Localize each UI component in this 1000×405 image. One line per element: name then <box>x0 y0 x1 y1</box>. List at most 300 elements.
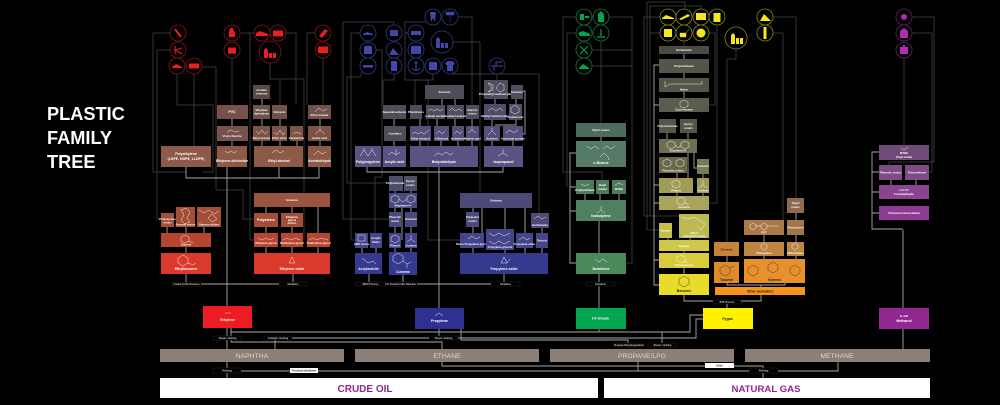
box: acrylic solvents: Acetate <box>256 88 267 92</box>
box: isobutylene <box>576 200 626 221</box>
label: Friedel Crafts reaction: Friedel Crafts Reaction <box>390 283 417 286</box>
feedstock bars <box>160 349 930 362</box>
box: acrylonitrile <box>355 253 382 274</box>
box: toluene upper <box>714 242 739 256</box>
box: acetone: Acetone <box>486 136 498 140</box>
box: polyesters: Polyesters <box>257 218 275 222</box>
box: polystyrene <box>159 213 176 227</box>
box: nylon <box>659 78 709 92</box>
label: refining <box>213 368 241 373</box>
label: refining: Refining <box>222 370 232 372</box>
box: epoxy resins <box>404 176 417 191</box>
label: oxidation: Oxidation <box>500 283 512 286</box>
box: phenolic resins: Phenolic <box>389 215 401 219</box>
box: butyl rubber: rubber <box>598 187 608 191</box>
box: polyurethanes <box>460 193 532 208</box>
box: formaldehyde: H-C=O <box>899 188 909 192</box>
box: phenol <box>389 233 401 248</box>
label: solvation <box>586 282 615 286</box>
box: styrene: Styrene <box>660 228 671 232</box>
box: glycol ethers: Ethylene <box>286 215 298 219</box>
box: acrylic acid: Acrylic acid <box>385 160 404 164</box>
box: alkyd polyester resins: polyester resins <box>683 234 705 238</box>
box: polymethyl methacrylate <box>479 80 513 99</box>
panel: ethylene family icons <box>169 25 331 74</box>
box: methyl ether: MTBE <box>615 187 623 191</box>
box: formaldehyde: Formaldehyde <box>894 192 914 196</box>
box: cyclohexane: Cyclohexane <box>675 108 693 112</box>
box: polycarbonate: Polycarbonate <box>386 181 406 185</box>
title: TREE <box>47 152 96 172</box>
label: fractional distillation white tag <box>290 368 318 373</box>
box: isobutanol <box>451 126 465 141</box>
box: ethylene glycol <box>280 233 304 247</box>
box: polyesters <box>254 213 278 227</box>
box: n-butyl acetate: n-Butyl acetate <box>425 114 446 118</box>
label: steam cracking <box>213 336 242 340</box>
icon: spray bottle <box>315 25 331 41</box>
bar: naphtha <box>160 349 344 362</box>
box: ethyl alcohol <box>254 146 303 167</box>
box: butyric acid esters <box>466 105 479 119</box>
box: phenol: Phenol <box>390 244 400 248</box>
label: Friedel Crafts reaction <box>172 282 201 286</box>
icon: card <box>186 58 202 74</box>
box: ethyl amines <box>253 126 271 141</box>
box: PVC <box>217 105 248 119</box>
box: acetone solvents <box>405 212 417 227</box>
process connector lines <box>167 54 916 378</box>
icon: paint roller <box>442 9 458 25</box>
box: styrene <box>161 233 211 247</box>
process labels <box>172 282 778 373</box>
box: polypropylene <box>355 146 381 167</box>
box: formaldehyde <box>879 185 929 199</box>
box: propylene <box>415 308 464 329</box>
box: hexamethylene <box>659 59 709 73</box>
box: butanols <box>425 85 464 99</box>
box: acetone <box>484 126 500 141</box>
box: paraxylene: Paraxylene <box>756 251 772 255</box>
box: ethoxylates <box>254 193 330 207</box>
box: benzene: Benzene <box>677 289 691 293</box>
box: ethylene dichloride <box>216 146 248 167</box>
box: ethylamine <box>289 126 305 141</box>
box: polybutadiene <box>575 180 595 194</box>
box: polyols <box>536 233 548 248</box>
panel: pygas boxes <box>658 46 805 329</box>
box: propylene oxide <box>460 253 548 274</box>
box: ethyl ether <box>272 126 288 141</box>
box: glycol ethers: ethers <box>288 221 297 225</box>
box: polyethylene: Polyethylene <box>175 152 197 156</box>
box: glycol ethers <box>456 233 488 248</box>
label: catalytic cracking <box>264 336 292 340</box>
box: superabsorbents: Superabsorbents <box>383 110 407 114</box>
box: alkyd resins: resins <box>791 205 800 209</box>
box: ethylamine: Ethylamine <box>289 136 305 140</box>
box: polystyrene: resins <box>163 220 172 224</box>
box: ethyl acetate <box>308 105 331 119</box>
box: isophorone: Isophorone <box>508 115 524 119</box>
box: polyether glycols: Propylene glycols <box>488 245 513 249</box>
label: fractional distillation white tag: Fractional distillation <box>292 370 317 372</box>
bar: natural gas <box>604 378 930 398</box>
box: polypropylene: Polypropylene <box>356 160 380 164</box>
icon: ribbon <box>170 25 186 41</box>
box: superabsorbents <box>383 105 407 119</box>
box: acetic acid: Acetic acid <box>312 136 327 140</box>
panel: propylene family icons <box>360 9 505 74</box>
box: butyric acid <box>464 126 481 141</box>
label: propane dehydrogenation: Propane Dehydrogenation <box>614 344 644 347</box>
icon: fabric <box>270 25 286 41</box>
icon: phone <box>386 58 402 74</box>
box: hexamethylene: Polyurethanes <box>674 64 694 68</box>
box: plasticizers: Plasticizers <box>788 226 804 230</box>
box: methyl methacrylate <box>481 104 509 120</box>
box: acetone solvents: Solvents <box>405 217 417 221</box>
box: C4 stream <box>576 308 626 329</box>
box: bisphenol A <box>659 139 697 153</box>
box: epoxy resins: resins <box>684 126 693 130</box>
panel: C4 boxes <box>575 123 626 329</box>
box: orthoxylene: Orthoxylene <box>787 251 804 255</box>
box: isobutylene: Isobutylene <box>591 214 611 218</box>
label: oxidation <box>279 282 307 286</box>
box: polyurethanes: Polyurethane <box>908 170 927 174</box>
box: acrylic solvents: solvents <box>256 92 268 96</box>
box: triethylene glycol: Triethylene glycol <box>306 241 331 245</box>
box: ethyl ether: Ethyl ether <box>272 136 288 140</box>
source bars <box>160 378 930 398</box>
box: propylene: Propylene <box>431 319 448 323</box>
box: plasticizers: Plasticizers <box>408 110 424 114</box>
box: ethylene oxide <box>254 253 330 274</box>
icon: pipes <box>576 9 592 25</box>
box: acrylic solvents <box>253 85 270 99</box>
box: methanol <box>879 308 929 329</box>
box: acetaldehyde <box>308 146 331 167</box>
box: alkyd resins: Alkyd <box>792 201 800 205</box>
box: diethylene glycol: Ethylene glycol <box>255 241 277 245</box>
box: styrene rubber: Styrene rubber <box>199 222 220 226</box>
icon: shoe sole <box>676 9 692 25</box>
box: isopropyl acetate <box>501 126 525 141</box>
box: phenolic resins <box>659 157 687 173</box>
box: ethylbenzene <box>161 253 211 274</box>
box: ethylene acetate: derivatives <box>254 112 269 116</box>
box: methanol: Methanol <box>896 319 912 323</box>
box: polycarbonate: Polycarbonate <box>658 124 678 128</box>
box: styrene <box>659 223 672 238</box>
icon: construction <box>386 42 402 58</box>
box: bisphenol A: Bisphenol A <box>670 148 687 152</box>
label: ammoxidation <box>356 282 385 286</box>
panel: C4 family icons <box>576 9 609 74</box>
box: butyric acid: Butyric acid <box>464 136 481 140</box>
box: solvents: Solvents <box>511 90 523 94</box>
box: ethylbenzene: Ethylbenzene <box>175 267 197 271</box>
box: PET: PET <box>761 230 767 234</box>
box: epoxy resins: Epoxy <box>406 179 415 183</box>
box: vinyl chloride <box>217 126 248 141</box>
box: toluene upper: Solvents <box>720 248 733 252</box>
box: ethyl hexanol: Ethyl hexanol <box>411 136 430 140</box>
bar: methane <box>745 349 930 362</box>
box: butadiene: Butadiene <box>593 267 610 271</box>
label: oxidation <box>491 282 520 286</box>
box: polyether polyols <box>466 212 480 227</box>
bar: crude oil: CRUDE OIL <box>338 384 392 395</box>
label: steam cracking <box>648 343 677 347</box>
box: propylene oxide: Propylene oxide <box>490 267 518 271</box>
box: nylon: Nylon <box>680 88 688 92</box>
box: toluene <box>714 262 739 283</box>
box: butyraldehyde: Butyraldehyde <box>432 160 456 164</box>
box: cumene: Cumene <box>396 270 410 274</box>
product connector lines <box>153 2 934 263</box>
box: polybutadiene: Polybutadiene <box>575 188 595 192</box>
icon: tire station <box>593 9 609 25</box>
box: acrylic acid <box>383 146 406 167</box>
box: ABS resins: ABS resins <box>354 242 370 246</box>
box: ethylene glycol: Diethylene glycol <box>280 241 304 245</box>
box: ethyl alcohol: Ethyl alcohol <box>268 159 290 163</box>
box: polymethyl methacrylate: Polymethyl methacrylate <box>479 92 513 96</box>
box: acetic acid <box>308 126 331 141</box>
box: n-butenes: n-Butene <box>593 161 609 165</box>
box: n-butenes <box>576 141 626 167</box>
bar: ethane <box>355 349 539 362</box>
box: styrene copolymers <box>176 207 196 227</box>
box: cumene <box>659 196 709 210</box>
icon: shoe <box>576 25 592 41</box>
box: xylenes: Xylenes <box>768 278 781 282</box>
icon: tube <box>757 25 773 41</box>
box: surfactants: Surfactants <box>676 48 692 52</box>
box: isobutanol: Isobutanol <box>451 136 465 140</box>
label: steam cracking: Steam cracking <box>435 337 453 340</box>
box: acetone: Acetone <box>697 188 709 192</box>
label: oxidation: Oxidation <box>287 283 299 286</box>
box: styrene rubber <box>197 207 221 227</box>
box: xylene <box>659 240 709 251</box>
label: refining <box>749 368 778 373</box>
icon: tooth <box>425 9 441 25</box>
box: vinyl chloride: Vinyl chloride <box>223 134 242 138</box>
box: ethylene acetate: Ethylene <box>255 108 268 112</box>
box: solvents <box>272 105 287 119</box>
box: isobutyl acetate: Isobutyl acetate <box>445 114 467 118</box>
icon: containers <box>259 41 281 63</box>
box: acrylic fibers <box>370 233 382 248</box>
label: steam cracking <box>429 336 458 340</box>
icon: ball <box>693 25 709 41</box>
box: benzene <box>659 274 709 295</box>
box: polyether polyols: Polyester <box>466 215 480 219</box>
icon: construction <box>757 9 773 25</box>
bar: ethane: ETHANE <box>433 353 461 360</box>
box: acetone <box>405 233 417 248</box>
box: cumene: Cumene <box>678 205 690 209</box>
box: surfactants <box>659 46 709 54</box>
box: polycarbonate <box>386 176 406 191</box>
box: pygas <box>703 308 753 329</box>
box: MTBE <box>879 145 929 160</box>
box: butyraldehyde <box>410 146 478 167</box>
box: epoxy resins <box>680 119 697 133</box>
label: steam cracking: Steam cracking <box>219 337 237 340</box>
box: acrylates <box>384 126 406 141</box>
box: styrene copolymers: Styrene resins <box>176 222 196 226</box>
box: glycol ethers: glycol <box>288 218 296 222</box>
icon: container <box>408 42 424 58</box>
box: butyl rubber: Butyl <box>599 183 606 187</box>
icon: medicine bottle <box>709 9 725 25</box>
box: nylon resins: Nylon resins <box>592 128 610 132</box>
box: ethylbenzene: Ethylbenzene <box>675 263 694 267</box>
icon: anchor <box>408 58 424 74</box>
title: FAMILY <box>47 128 112 148</box>
icon: sneaker <box>660 9 676 25</box>
box: alkyd resins <box>787 198 804 213</box>
label: ammoxidation: MIOX Process <box>362 283 379 286</box>
label: BTX process <box>713 300 741 304</box>
box: bisphenol A <box>389 193 417 208</box>
bar: natural gas: NATURAL GAS <box>732 384 801 395</box>
box: acetaldehyde: Acetaldehyde <box>308 159 331 163</box>
icon: containers <box>725 27 747 49</box>
box: solvents <box>511 85 523 99</box>
box: PET <box>744 220 784 235</box>
box: propylene glycol ether: Propylene ether <box>514 242 536 246</box>
icon: shirt <box>442 58 458 74</box>
box: isobutyl acetate <box>445 105 467 119</box>
box: n-butanol: n-Butanol <box>435 136 448 140</box>
box: acrylic fibers: Acrylic <box>371 236 381 240</box>
box: xylenes <box>744 259 805 283</box>
box: polyether glycols <box>486 229 514 250</box>
label: solvation: Solvation <box>595 283 606 286</box>
label: catalytic cracking: Catalytic cracking <box>268 337 289 340</box>
box: ethoxylates: Solvents <box>286 198 298 202</box>
box: solvents <box>697 159 709 174</box>
icon: cushion <box>660 25 676 41</box>
bar: propane/LPG: PROPANE/LPG <box>618 353 666 360</box>
panel: pygas family icons <box>660 9 773 49</box>
panel: methanol boxes <box>879 145 929 329</box>
box: n-butyl acetate <box>425 105 446 119</box>
box: methanol: H–OH <box>900 314 908 318</box>
box: ethylene: Ethylene <box>220 318 235 322</box>
box: MTBE: MTBE <box>900 151 908 155</box>
box: acrylonitrile: Acrylonitrile <box>358 267 379 271</box>
box: PVC: PVC <box>228 110 236 114</box>
box: paraxylene <box>744 242 784 256</box>
box: acetone: Acetone <box>405 244 417 248</box>
bar: methane: METHANE <box>821 353 854 360</box>
icon: spray can <box>896 25 912 41</box>
icon: boot <box>576 58 592 74</box>
box: propylene glycol ether <box>514 233 536 248</box>
box: ethylbenzene <box>659 253 709 268</box>
box: ethylene oxide: Ethylene oxide <box>280 267 304 271</box>
box: isopropyl acetate: Isopropyl acetate <box>501 136 525 140</box>
box: polystyrene: Polystyrene <box>159 217 176 221</box>
box: bisphenol A: Bisphenol A <box>395 204 412 208</box>
icon: medical tube <box>170 42 186 58</box>
box: ethylene <box>203 306 252 328</box>
box: triethylene glycol <box>306 233 331 247</box>
icon: containers <box>431 31 453 53</box>
icon: shoe <box>169 58 185 74</box>
title: PLASTIC <box>47 104 125 124</box>
label: steam cracking: Steam cracking <box>654 344 672 347</box>
box: polycarbonate <box>658 119 678 133</box>
box: C4 stream: C4 stream <box>592 316 609 320</box>
box: orthoxylene <box>787 242 804 256</box>
box: butyric acid esters: esters <box>468 112 477 116</box>
icon: seat <box>386 25 402 41</box>
box: ethylene acetate <box>253 105 270 119</box>
box: styrene: Styrene <box>181 242 192 246</box>
box: acrylic fibers: fibers <box>372 240 380 244</box>
box: cyclohexane <box>659 98 709 112</box>
title <box>47 104 125 172</box>
box: ABS resins <box>354 233 370 248</box>
label: Friedel Crafts reaction: Friedel Crafts Reaction <box>173 283 200 286</box>
box: methyl ether <box>612 180 626 194</box>
box: plasticizers <box>408 105 424 119</box>
box: toluene: Toluene <box>720 278 733 282</box>
icon: sneaker <box>254 25 270 41</box>
panel: ethylene boxes <box>159 85 331 328</box>
bar: propane/LPG <box>550 349 734 362</box>
panel: methanol family icons <box>896 9 912 58</box>
box: acetone <box>697 178 709 193</box>
label: white tag: Other <box>716 364 723 368</box>
icon: sheet <box>315 42 331 58</box>
box: butanols: Solvents <box>438 90 451 94</box>
box: butyric acid esters: Butyric <box>468 108 478 112</box>
box: phenol <box>659 178 693 193</box>
box: butadiene <box>576 253 626 274</box>
box: solvents: Solvents <box>697 164 709 168</box>
box: polyether polyols: resins <box>468 219 477 223</box>
label: white tag <box>705 363 734 368</box>
label: BTX process: BTX Process <box>720 301 735 304</box>
box: phenol: Phenol <box>671 188 681 192</box>
icon: seat <box>693 9 709 25</box>
box: ethyl hexanol <box>410 126 431 141</box>
icon: appliance <box>425 58 441 74</box>
icon: shoe <box>360 25 376 41</box>
box: solvents: Solvents <box>273 110 286 114</box>
icon: tube <box>360 58 376 74</box>
box: glycol ethers <box>281 213 303 227</box>
bar: crude oil <box>160 378 598 398</box>
box: phenolic resins: resins <box>391 219 400 223</box>
box: phenolic resins <box>879 165 902 180</box>
box: n-butanol <box>434 126 449 141</box>
box: polyethylene <box>161 146 211 167</box>
box: MTBE: (Fuel oxide) <box>896 155 912 159</box>
box: pygas: Pygas <box>722 317 733 321</box>
box: glycol ethers: Mono Propylene glycol <box>456 242 488 246</box>
box: chemical intermediates <box>879 206 929 220</box>
box: methyl methacrylate: Methyl methacrylate <box>481 114 509 118</box>
